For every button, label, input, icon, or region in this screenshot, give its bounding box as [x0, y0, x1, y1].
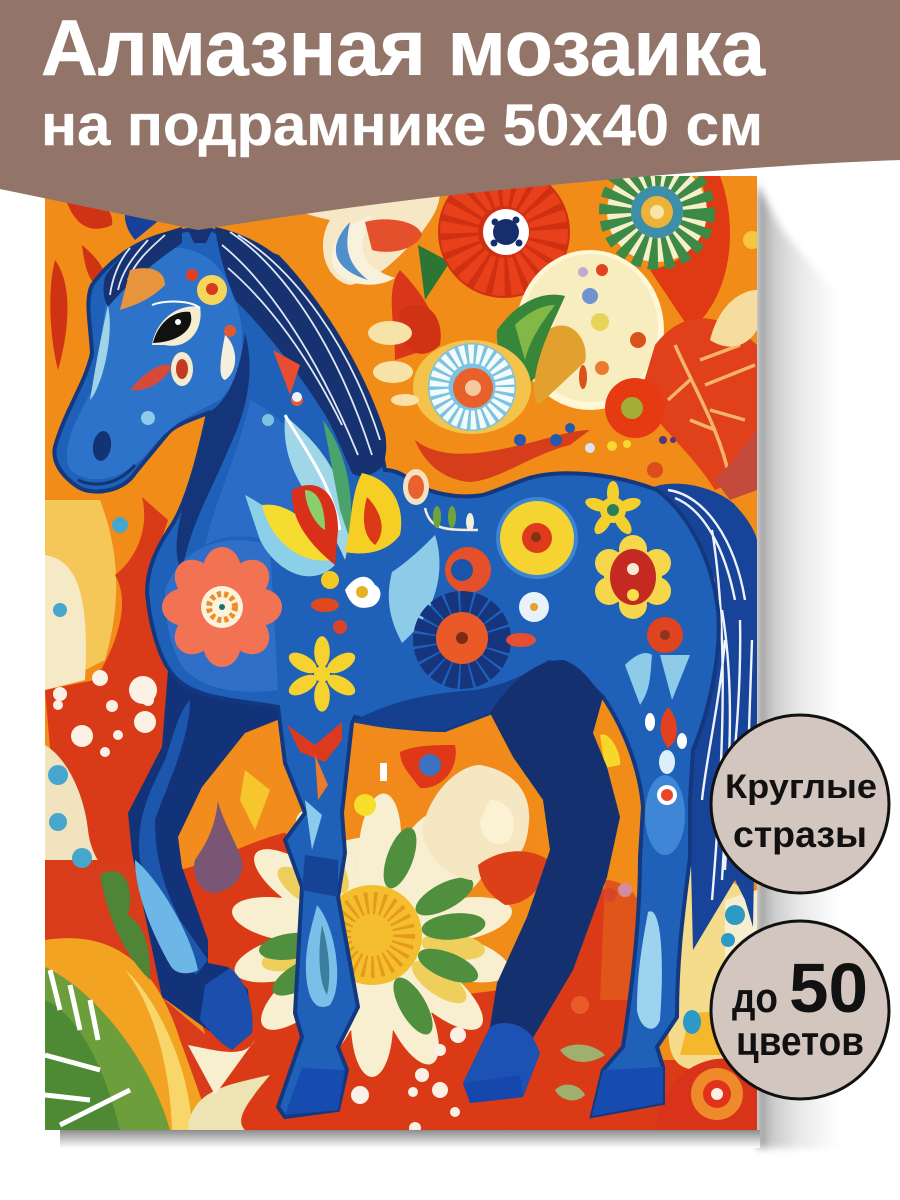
tail	[653, 484, 757, 950]
cream moon	[497, 250, 664, 410]
red flower	[438, 185, 570, 298]
neck motif	[262, 350, 303, 426]
daisy cream disk	[281, 838, 438, 1031]
red leaf plume, top right	[605, 231, 761, 500]
canvas shadow	[60, 184, 840, 1148]
small blue blobs at left	[48, 517, 128, 868]
belly band	[352, 660, 566, 731]
background base	[45, 176, 757, 1130]
badge: round rhinestones	[711, 715, 889, 893]
red crescent behind green daisy	[650, 176, 730, 330]
upper orange between legs	[180, 826, 286, 870]
badge: up to 50 colours: до	[732, 974, 778, 1021]
subtitle: на подрамнике 50х40 см	[41, 93, 763, 158]
body flowers	[426, 481, 690, 805]
badge: up to 50 colours	[711, 921, 889, 1099]
blue flower	[413, 340, 531, 434]
mane	[104, 213, 386, 476]
coral chest flower	[162, 547, 282, 667]
far hind leg	[463, 660, 620, 1103]
bottom red field	[182, 832, 689, 1130]
green fern bottom-left	[45, 871, 270, 1130]
far front leg	[128, 670, 290, 1050]
big yellow flower	[595, 535, 671, 619]
neck shadow	[177, 333, 250, 570]
daisy yellow accents	[262, 866, 485, 1004]
forehead flower and head motifs	[90, 268, 236, 400]
bottom white sprigs	[351, 1027, 466, 1134]
autumn leaves near flowers	[50, 199, 441, 370]
red and blue sprig under flowers	[415, 423, 676, 482]
small cream hearts, centre-top	[368, 321, 419, 406]
small yellow flower	[584, 481, 642, 537]
title: Алмазная мозаика	[41, 3, 766, 92]
badge: up to 50 colours: 50	[789, 949, 868, 1027]
eye	[152, 302, 201, 346]
coral petals	[162, 547, 282, 667]
header band	[0, 0, 900, 230]
badge: round rhinestones: Круглые	[725, 768, 877, 806]
cream and red flowers between legs	[194, 734, 620, 905]
daisy green leaves	[257, 823, 487, 1040]
yellow leg flower	[285, 636, 359, 712]
large daisy	[229, 792, 515, 1077]
blue sprig right	[683, 905, 745, 1034]
bottom-right orange medallion	[691, 1068, 743, 1120]
nostril and muzzle	[78, 411, 155, 484]
head highlight	[67, 248, 242, 479]
right cream and yellow	[668, 866, 742, 1069]
left lower background	[45, 497, 213, 1130]
badge: round rhinestones: стразы	[733, 814, 867, 855]
navy flower	[426, 604, 498, 676]
green daisy	[607, 162, 707, 262]
painting: horse on floral background	[45, 162, 761, 1134]
leg flowers	[285, 636, 359, 850]
daisy petals	[229, 792, 515, 1077]
fruit and blue crescent, top	[300, 190, 450, 360]
chest lighter	[165, 540, 278, 692]
badge: up to 50 colours: цветов	[736, 1018, 864, 1064]
white floral sprigs at left	[53, 670, 157, 757]
sprigs between hind legs	[555, 883, 632, 1100]
horse body	[54, 230, 719, 1117]
wing motif	[245, 415, 478, 643]
leg lower lights	[285, 1068, 345, 1115]
neck lighter	[205, 400, 302, 545]
